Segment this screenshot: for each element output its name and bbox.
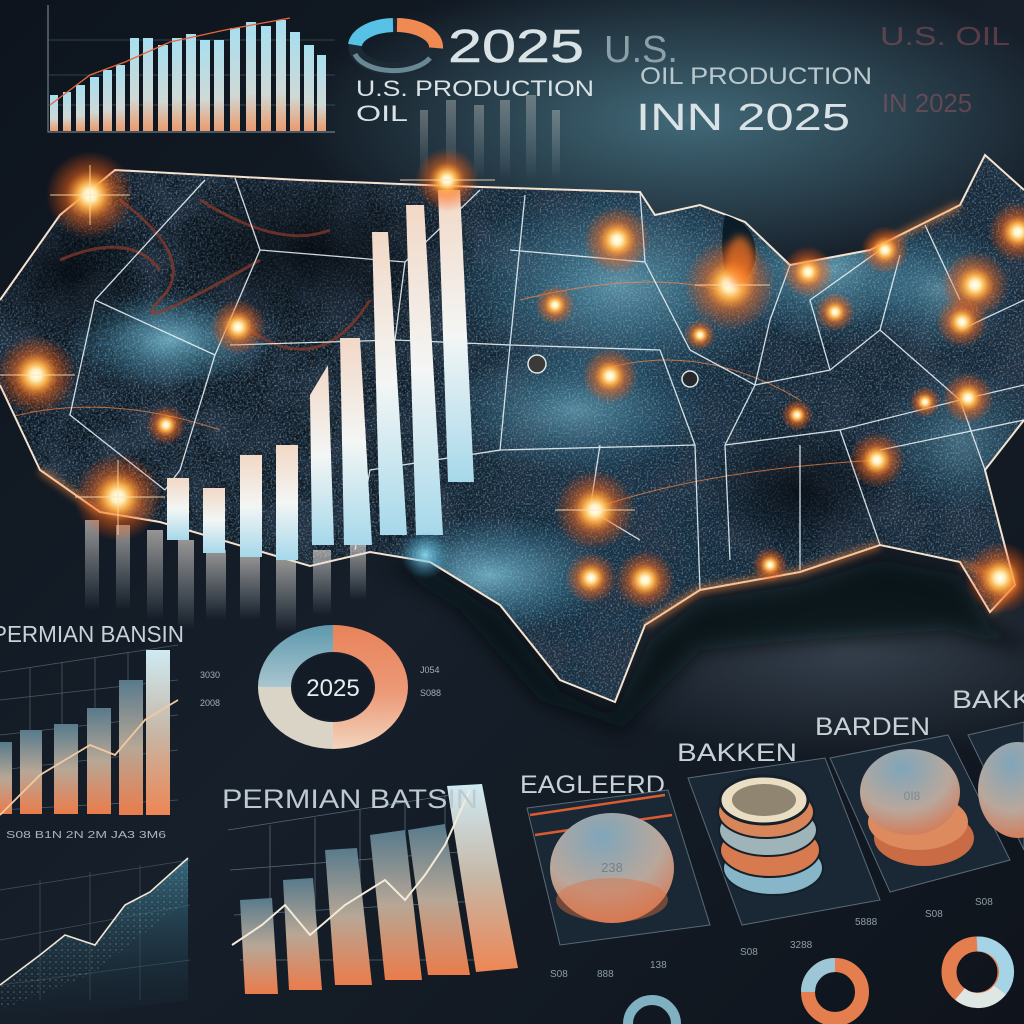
small axis labels: 138 <box>650 960 667 971</box>
field labels: BARDEN <box>815 713 930 741</box>
faded title reflection <box>880 21 1010 118</box>
map of the United States <box>0 153 1024 704</box>
title: OIL <box>356 101 408 126</box>
left bar chart <box>0 645 178 841</box>
small axis labels: S08 <box>925 909 943 920</box>
small axis labels <box>550 897 993 980</box>
panel: Eagle Ford <box>527 790 710 945</box>
donut chart 2025: S088 <box>420 688 441 698</box>
small axis labels: 3288 <box>790 940 813 951</box>
state borders <box>70 178 1024 590</box>
map shadow <box>380 560 1024 730</box>
center heading: Permian Basin: PERMIAN BATSIN <box>222 784 478 814</box>
small axis labels: 5888 <box>855 917 878 928</box>
donut chart 2025: 2008 <box>200 698 220 708</box>
panel: Barden: 0I8 <box>904 789 921 803</box>
donut chart 2025: J054 <box>420 665 440 675</box>
field labels: BAKKEN <box>677 739 797 767</box>
panel: Bakken partial <box>968 722 1024 850</box>
panel: Bakken <box>688 758 880 925</box>
panel: Eagle Ford: 238 <box>601 860 623 875</box>
donut chart 2025: 3030 <box>200 670 220 680</box>
small axis labels: S08 <box>740 947 758 958</box>
panel: Barden <box>830 735 1010 892</box>
map pins <box>528 355 698 387</box>
central white bars on map <box>167 190 474 560</box>
gulf haze <box>550 540 1024 760</box>
field labels: EAGLEERD <box>520 771 665 799</box>
small axis labels: S08 <box>550 969 568 980</box>
title: OIL PRODUCTION <box>640 63 872 90</box>
title: U.S. PRODUCTION <box>356 76 594 101</box>
production hub glows <box>0 148 1024 614</box>
faded title reflection: U.S. OIL <box>880 21 1010 51</box>
small axis labels: S08 <box>975 897 993 908</box>
small axis labels: 888 <box>597 969 614 980</box>
donut chart 2025: 2025 <box>306 675 360 702</box>
title <box>356 20 872 139</box>
title: 2025 <box>448 20 584 72</box>
title: INN 2025 <box>636 97 850 139</box>
small donut charts <box>628 944 1007 1024</box>
left bar chart: S08 B1N 2N 2M JA3 3M6 <box>6 830 167 841</box>
top bar chart <box>48 5 335 132</box>
field labels <box>520 686 1024 799</box>
glowing coast <box>40 205 1015 625</box>
lower-left line chart <box>0 858 190 1024</box>
Lake Michigan <box>722 215 756 286</box>
background teal haze <box>290 0 1024 270</box>
center bar chart <box>228 784 518 994</box>
field labels: BAKK <box>952 686 1024 714</box>
donut chart 2025 <box>200 625 441 749</box>
title: U.S. <box>604 29 678 71</box>
top donut icon <box>355 25 436 71</box>
faded title reflection: IN 2025 <box>882 88 972 118</box>
faded vertical bars above map <box>420 95 560 180</box>
bar reflections below map <box>85 520 366 632</box>
